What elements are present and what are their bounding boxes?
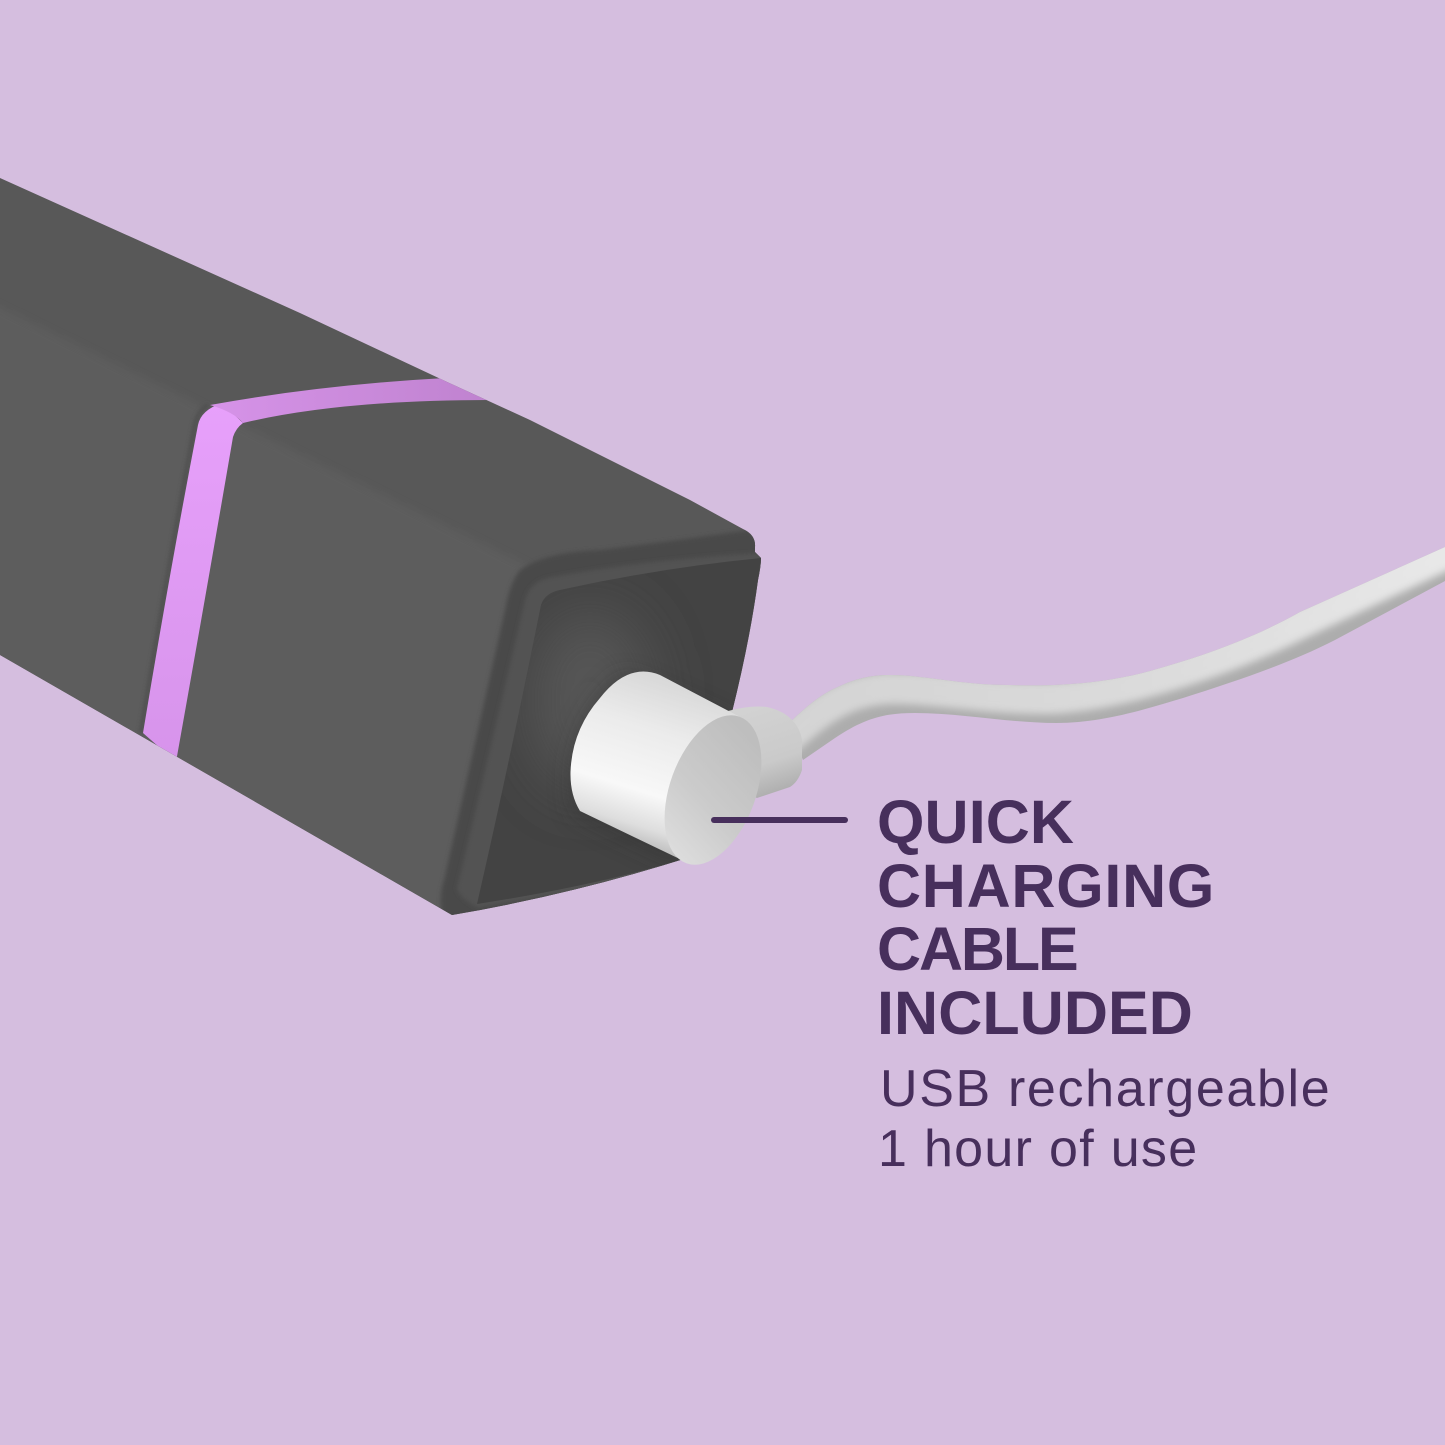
plug end face: [646, 702, 780, 878]
body top face: [0, 170, 770, 920]
end cap face: [477, 558, 761, 904]
plug contact shadow: [573, 680, 618, 750]
leader line: [714, 817, 845, 823]
end cap raised stripe: [457, 553, 762, 908]
heading: quick charging cable included: [877, 788, 1215, 1046]
text: USB details: USB rechargeable: [880, 1060, 1331, 1118]
band seam shadow: [141, 405, 208, 733]
cable strain relief: [728, 706, 802, 798]
accent band top: [210, 378, 490, 423]
heading: quick charging cable included: QUICK: [877, 788, 1074, 856]
face base: [477, 558, 761, 904]
text: USB details: 1 hour of use: [878, 1120, 1198, 1178]
cable highlight: [780, 547, 1445, 745]
device body: [0, 170, 770, 950]
heading: quick charging cable included: CABLE: [877, 915, 1077, 983]
text: USB details: [878, 1060, 1331, 1178]
plug body: [570, 672, 742, 862]
heading: quick charging cable included: INCLUDED: [877, 978, 1193, 1046]
heading: quick charging cable included: CHARGING: [877, 852, 1215, 920]
accent band side: [143, 403, 243, 762]
USB plug: [570, 672, 780, 878]
end cap rim: [441, 530, 770, 925]
illustration: device with charging cable: [0, 178, 1445, 915]
charging cable: [780, 540, 1445, 770]
face glow: [530, 610, 650, 790]
cable base shade: [780, 540, 1445, 770]
body front face: [0, 655, 454, 915]
